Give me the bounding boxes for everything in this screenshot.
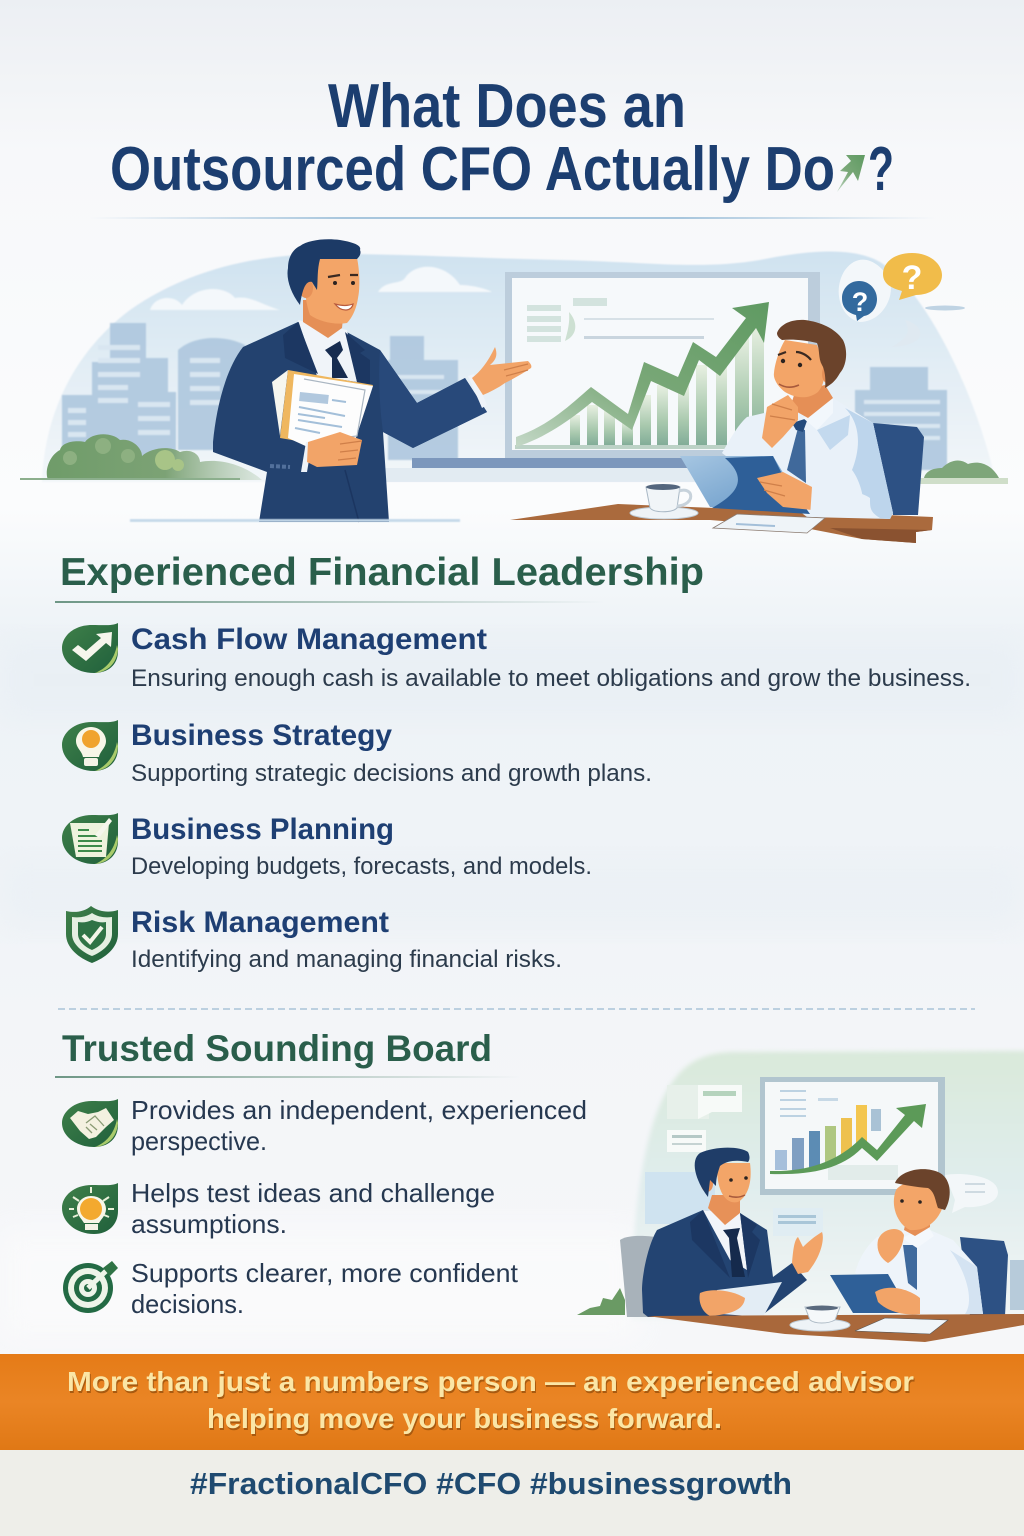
footer hashtags bbox=[0, 1450, 1024, 1536]
text: Business Planning bbox=[131, 813, 592, 880]
presenter bbox=[213, 239, 531, 522]
item: Cash Flow Management bbox=[62, 623, 971, 692]
title: What Does an bbox=[328, 72, 686, 141]
text: Business Planning: Developing budgets, forecasts, and models. bbox=[131, 853, 592, 880]
callout banner: helping move your business forward. bbox=[208, 1405, 723, 1436]
text: Cash Flow Management bbox=[131, 623, 971, 692]
text: Risk Management: Identifying and managing financial risks. bbox=[131, 946, 562, 973]
bullet: independent perspective bbox=[62, 1095, 587, 1156]
callout banner: More than just a numbers person — an experienced advisor bbox=[68, 1368, 915, 1399]
bushes bbox=[20, 434, 1008, 503]
hero backdrop with skyline bbox=[42, 252, 996, 482]
illustration: CFO presenting to business owner bbox=[20, 239, 1008, 543]
board with chart bbox=[760, 1077, 945, 1195]
bullet: test ideas bbox=[62, 1178, 495, 1239]
coffee and papers bbox=[630, 484, 825, 533]
text: Business Strategy: Business Strategy bbox=[131, 719, 392, 752]
text: test ideas: Helps test ideas and challenge bbox=[131, 1178, 495, 1208]
callout banner bbox=[0, 1354, 1024, 1450]
callout banner: helping move your business forward. bbox=[207, 1403, 722, 1434]
text: independent perspective: Provides an independent, experienced bbox=[131, 1095, 587, 1125]
icon: shield bbox=[66, 906, 118, 963]
text: Cash Flow Management: Ensuring enough cash is available to meet obligations and grow the business. bbox=[131, 665, 971, 692]
text: independent perspective: perspective. bbox=[131, 1126, 267, 1156]
speech bubbles: ? bbox=[852, 287, 868, 317]
text: confident decisions: Supports clearer, more confident bbox=[131, 1258, 519, 1288]
text: Risk Management: Risk Management bbox=[131, 906, 389, 939]
item: Business Strategy bbox=[62, 719, 652, 787]
text: confident decisions: decisions. bbox=[131, 1289, 244, 1319]
icon: notepad leaf bbox=[62, 813, 118, 864]
footer hashtags: #FractionalCFO #CFO #businessgrowth bbox=[190, 1466, 792, 1501]
icon: light bulb leaf bbox=[62, 720, 118, 771]
title: ? bbox=[868, 135, 894, 204]
table with coffee bbox=[647, 1306, 1024, 1342]
seated advisor bbox=[680, 320, 924, 519]
icon: cash flow leaf bbox=[62, 623, 118, 673]
icon: target bbox=[63, 1261, 118, 1313]
plant bbox=[577, 1288, 625, 1315]
text: Business Strategy: Supporting strategic decisions and growth plans. bbox=[131, 760, 652, 787]
speech bubbles: ? bbox=[902, 259, 922, 297]
illustration: advisor and client at table bbox=[577, 1051, 1024, 1342]
icon: handshake bbox=[62, 1099, 118, 1147]
text: Business Strategy bbox=[131, 719, 652, 787]
documents bbox=[272, 370, 373, 465]
heading: Experienced Financial Leadership: Experienced Financial Leadership bbox=[60, 551, 704, 594]
tablet bbox=[680, 456, 812, 514]
speech bubbles bbox=[839, 253, 965, 347]
text: test ideas bbox=[131, 1178, 495, 1239]
title bbox=[110, 72, 894, 204]
bullet: confident decisions bbox=[63, 1258, 519, 1319]
text: Risk Management bbox=[131, 906, 562, 973]
client with tablet bbox=[830, 1169, 1008, 1316]
desk with coffee and papers bbox=[510, 504, 933, 543]
backdrop bbox=[632, 1051, 1024, 1320]
text: independent perspective bbox=[131, 1095, 587, 1156]
item: Risk Management bbox=[66, 906, 562, 973]
advisor in suit bbox=[620, 1148, 823, 1317]
screen and growth chart bbox=[385, 272, 920, 482]
text: test ideas: assumptions. bbox=[131, 1209, 287, 1239]
icon: bright bulb bbox=[62, 1183, 118, 1234]
callout banner: More than just a numbers person — an experienced advisor bbox=[67, 1366, 914, 1397]
title: Outsourced CFO Actually Do bbox=[110, 135, 835, 204]
text: Cash Flow Management: Cash Flow Management bbox=[131, 623, 487, 656]
text: Business Planning: Business Planning bbox=[131, 813, 394, 846]
item: Business Planning bbox=[62, 813, 592, 880]
heading: Trusted Sounding Board: Trusted Sounding Board bbox=[62, 1028, 492, 1069]
icon: title arrow bbox=[837, 155, 865, 192]
text: confident decisions bbox=[131, 1258, 519, 1319]
